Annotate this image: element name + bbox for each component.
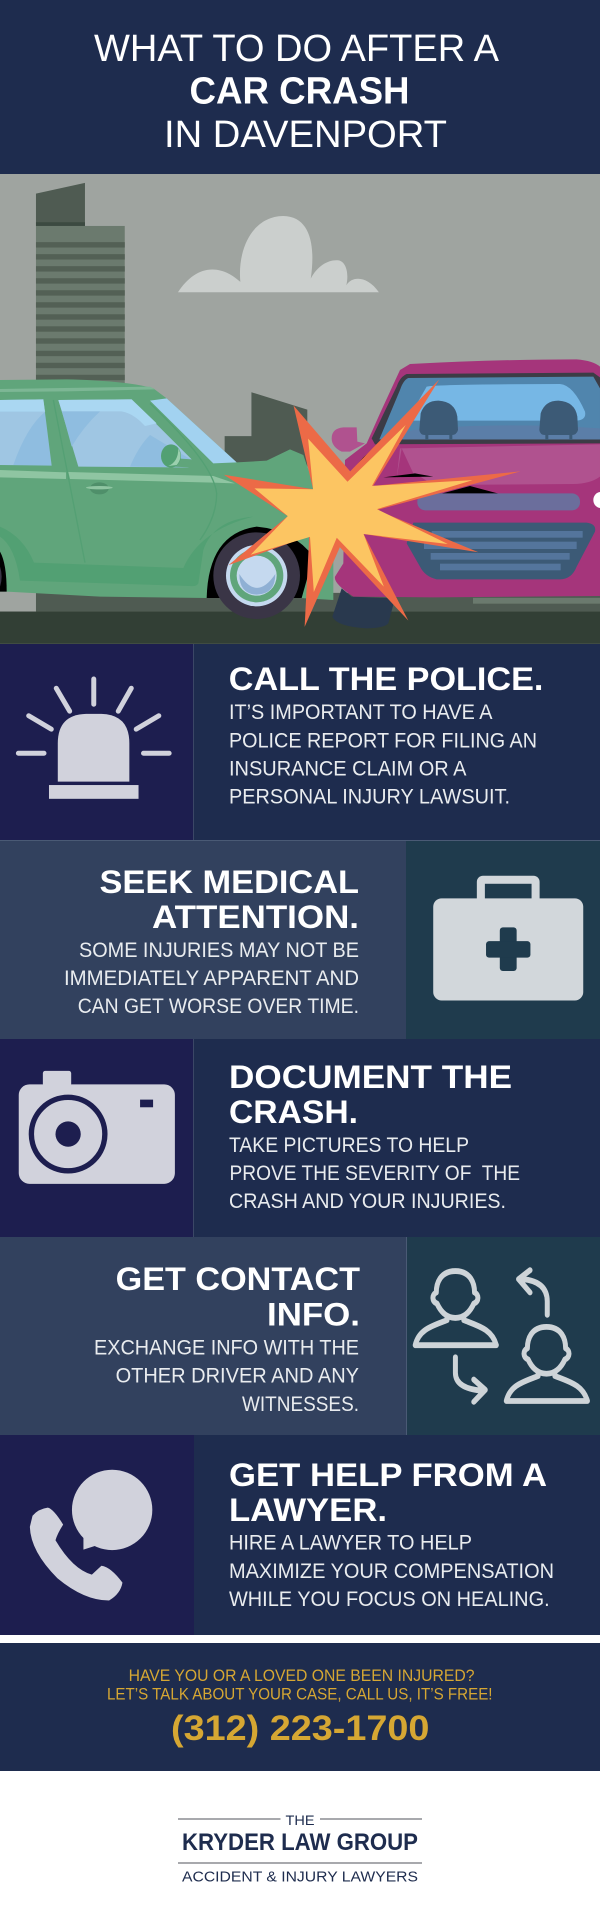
body text: IMMEDIATELY APPARENT AND	[64, 967, 359, 990]
panel: call the police	[0, 644, 600, 840]
heading	[100, 864, 359, 935]
illustration: car crash scene	[0, 174, 600, 644]
body text: MAXIMIZE YOUR COMPENSATION	[229, 1560, 554, 1583]
body text	[229, 1134, 520, 1213]
icon: medical kit	[433, 876, 583, 1001]
panel: get help from a lawyer	[0, 1435, 600, 1635]
panel: seek medical attention	[0, 840, 600, 1039]
body text: CAN GET WORSE OVER TIME.	[78, 995, 359, 1018]
heading: CRASH.	[229, 1094, 358, 1130]
body text: INSURANCE CLAIM OR A	[229, 758, 466, 780]
body text: EXCHANGE INFO WITH THE	[94, 1336, 359, 1360]
panel: document the crash	[0, 1039, 600, 1237]
call to action text	[107, 1666, 492, 1704]
header: title banner	[0, 0, 600, 174]
logo: Kryder Law Group: KRYDER LAW GROUP	[182, 1829, 418, 1856]
heading: CALL THE POLICE.	[229, 661, 543, 697]
body text: POLICE REPORT FOR FILING AN	[229, 730, 537, 752]
heading: DOCUMENT THE	[229, 1059, 512, 1095]
logo: Kryder Law Group	[178, 1812, 422, 1886]
body text: PERSONAL INJURY LAWSUIT.	[229, 785, 510, 808]
explosion star	[224, 379, 520, 627]
title text: WHAT TO DO AFTER A	[94, 28, 500, 70]
body text: TAKE PICTURES TO HELP	[229, 1134, 469, 1157]
wheel	[213, 532, 300, 619]
body text	[229, 701, 537, 808]
body text: PROVE THE SEVERITY OF THE	[230, 1162, 520, 1185]
body text: SOME INJURIES MAY NOT BE	[79, 939, 359, 962]
title text: CAR CRASH	[190, 71, 410, 113]
body text	[94, 1336, 359, 1416]
front tire	[332, 588, 395, 628]
pink car	[332, 359, 600, 628]
icon: camera	[19, 1071, 175, 1184]
body text: IT’S IMPORTANT TO HAVE A	[229, 701, 492, 724]
heading: ATTENTION.	[152, 899, 359, 935]
heading	[116, 1261, 360, 1332]
body text: WITNESSES.	[242, 1393, 359, 1416]
icon: exchanging contacts	[415, 1270, 587, 1402]
phone number: (312) 223-1700	[171, 1709, 429, 1748]
heading: GET CONTACT	[116, 1261, 360, 1297]
heading: LAWYER.	[229, 1492, 387, 1528]
call to action text: LET’S TALK ABOUT YOUR CASE, CALL US, IT’S FREE!	[107, 1685, 492, 1704]
panel: get contact info	[0, 1237, 600, 1435]
logo: Kryder Law Group: THE	[286, 1812, 314, 1828]
city background, cloud and road	[0, 183, 600, 644]
call to action banner	[0, 1643, 600, 1771]
heading	[229, 1457, 547, 1528]
call to action text: HAVE YOU OR A LOVED ONE BEEN INJURED?	[129, 1666, 474, 1685]
green car	[0, 379, 333, 619]
title text	[94, 28, 500, 156]
logo: Kryder Law Group: ACCIDENT & INJURY LAWYERS	[182, 1870, 418, 1886]
title text: IN DAVENPORT	[164, 114, 447, 156]
body text: HIRE A LAWYER TO HELP	[229, 1532, 472, 1555]
heading: INFO.	[267, 1296, 360, 1332]
heading: SEEK MEDICAL	[100, 864, 359, 900]
heading: GET HELP FROM A	[229, 1457, 547, 1493]
icon: police siren	[18, 679, 169, 799]
body text: OTHER DRIVER AND ANY	[116, 1365, 359, 1388]
body text: WHILE YOU FOCUS ON HEALING.	[229, 1588, 550, 1611]
heading	[229, 1059, 512, 1130]
body text	[64, 939, 359, 1018]
icon: phone and speech bubble	[30, 1470, 152, 1601]
body text	[229, 1532, 554, 1611]
body text: CRASH AND YOUR INJURIES.	[229, 1190, 506, 1213]
